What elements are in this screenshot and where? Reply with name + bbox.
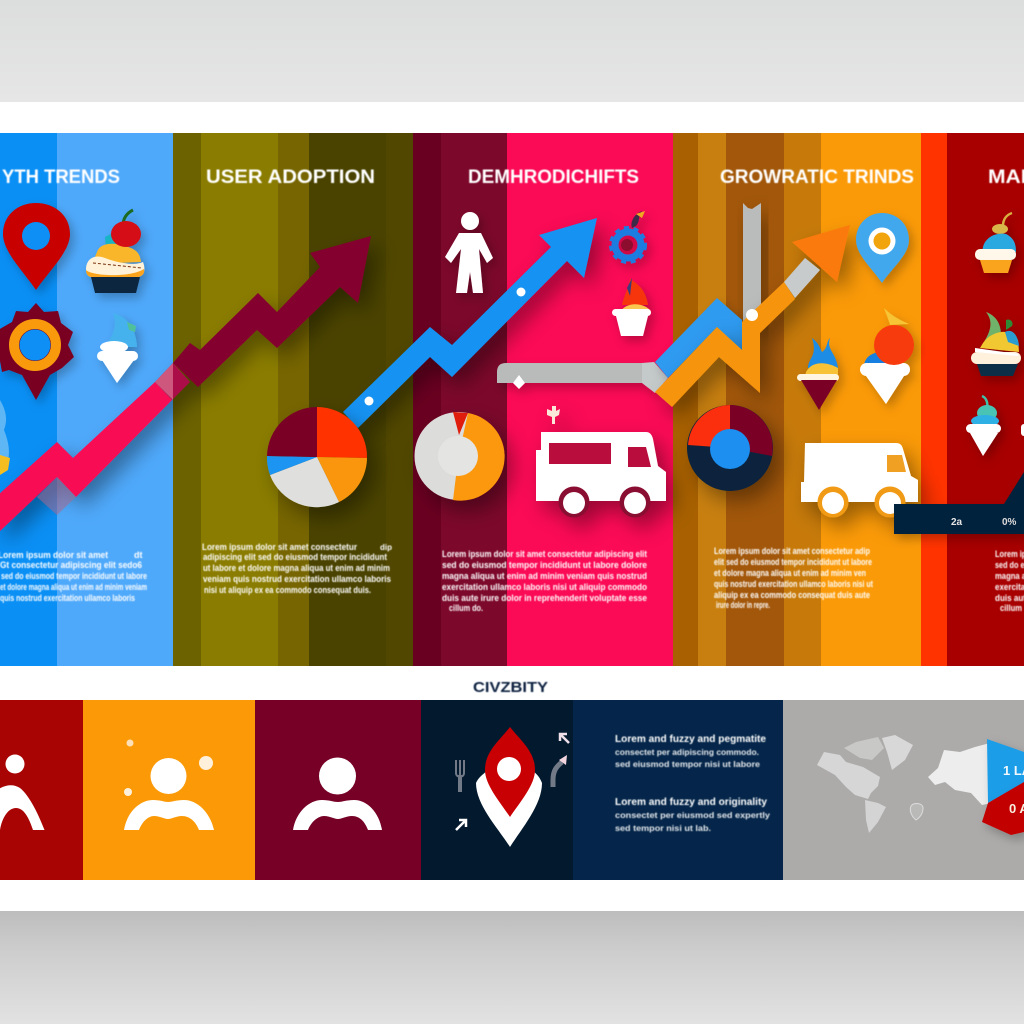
text block: column two: adipiscing elit sed do eiusmod tempor incididunt <box>203 552 387 562</box>
icon: blue map pin <box>856 213 909 283</box>
icon: red ball ice cream <box>860 308 914 404</box>
icon: maroon panel cupcake two <box>971 312 1021 376</box>
arrow fade: translucent joints <box>37 363 173 515</box>
text block: column one: et dolore magna aliqua ut enim ad minim veniam <box>0 582 147 592</box>
icon: truck one <box>536 406 666 518</box>
icon: person <box>293 758 382 830</box>
icon: gear pin <box>0 303 74 400</box>
chart: red map flag <box>982 782 1024 835</box>
icon: cherry cupcake <box>86 210 144 293</box>
icon: edge cone fragment <box>1021 424 1024 436</box>
text block: column three: Lorem ipsum dolor sit amet consectetur adipiscing elit <box>442 549 647 559</box>
text block: column two: nisi ut aliquip ex ea commodo consequat duis. <box>204 585 371 595</box>
icon: edge ice cream <box>0 400 10 475</box>
text block: lower paragraph two: Lorem and fuzzy and originality <box>615 796 767 808</box>
text block: column four: irure dolor in repre. <box>716 600 770 610</box>
stat label one: 2a <box>951 517 963 528</box>
icon: ice cream cone blue <box>97 313 138 383</box>
text block: column two <box>202 542 392 595</box>
text block: column one: Lorem ipsum dolor sit amet <box>0 550 108 560</box>
text block: column four: quis nostrud exercitation ullamco laboris nisi ut <box>714 579 873 589</box>
text block: lower paragraph two <box>615 796 770 833</box>
text block: column one: sed do eiusmod tempor incididunt ut labore <box>1 571 147 581</box>
icon: sundae cone <box>797 338 839 410</box>
heading: growth trends: YTH TRENDS <box>2 167 120 188</box>
icon: partial person <box>0 754 44 830</box>
text block: column one: dt <box>134 550 142 560</box>
text block: column one: Gt consectetur adipiscing elit sedo6 <box>0 560 142 570</box>
chart: donut two <box>414 412 505 501</box>
text block: column four: Lorem ipsum dolor sit amet consectetur adip <box>714 546 870 556</box>
text block: column three: cillum do. <box>449 603 483 613</box>
text block: column three: magna aliqua ut enim ad minim veniam quis nostrud <box>442 571 647 581</box>
arrow: blue growth arrow <box>343 218 597 428</box>
arrow: blue chevron <box>655 298 742 378</box>
icon: small arrow top <box>560 734 569 743</box>
text block: column five <box>995 549 1024 613</box>
text block: column three: duis aute irure dolor in reprehenderit voluptate esse <box>442 593 647 603</box>
text block: column three <box>442 549 647 613</box>
icon: blue gear <box>611 211 645 262</box>
heading: city: CIVZBITY <box>473 679 548 696</box>
text block: column two: dip <box>380 543 392 552</box>
heading: growth trends two: GROWRATIC TRINDS <box>720 167 914 188</box>
stat label two: 0% <box>1002 517 1017 528</box>
text block: column four <box>714 546 873 610</box>
icon: person with dots <box>124 740 214 830</box>
text block: column two: ut labore et dolore magna aliqua ut enim ad minim <box>203 563 390 573</box>
chart: pie one <box>267 407 367 507</box>
heading: user adoption: USER ADOPTION <box>206 167 375 188</box>
text block: lower paragraph one: consectet per adipiscing commodo. <box>615 747 759 757</box>
panel: striped top band <box>0 133 1024 666</box>
icon: curved road arrow <box>553 755 567 787</box>
icon: maroon panel cupcake one <box>975 213 1016 273</box>
text block: column one <box>0 550 147 603</box>
icon: truck two <box>801 443 918 518</box>
chart: dark stat bar <box>894 472 1024 534</box>
map: world continents <box>817 735 992 833</box>
text block: column two: Lorem ipsum dolor sit amet consectetur <box>202 542 357 552</box>
text block: column three: sed do eiusmod tempor incididunt ut labore dolore <box>442 560 647 570</box>
arrow: red to maroon growth arrow <box>0 236 371 533</box>
chart: blue map flag <box>987 739 1024 803</box>
text block: lower paragraph two: sed tempor nisi ut lab. <box>615 823 711 833</box>
panel: bottom band <box>0 700 1024 880</box>
icon: pink panel cupcake <box>612 278 651 336</box>
text block: lower paragraph one: sed eiusmod tempor nisi ut labore <box>615 759 760 769</box>
icon: small arrow bottom <box>456 820 466 830</box>
text block: lower paragraph one: Lorem and fuzzy and pegmatite <box>615 733 766 745</box>
chart: donut three <box>687 405 773 491</box>
text block: lower paragraph one <box>615 733 766 769</box>
icon: red map pin <box>3 203 70 290</box>
arrow: grey connector <box>497 362 668 393</box>
headings row <box>2 167 1024 188</box>
text block: column four: et dolore magna aliqua ut enim ad minim ven <box>714 568 866 578</box>
arrow: grey vertical bar <box>743 203 761 322</box>
icon: person <box>445 212 493 293</box>
text block: column three: exercitation ullamco laboris nisi ut aliquip commodo <box>442 582 647 592</box>
text block: column one: quis nostrud exercitation ullamco laboris <box>0 593 135 603</box>
heading: demographic shifts: DEMHRODICHIFTS <box>468 167 639 188</box>
text block: column four: aliquip ex ea commodo consequat duis aute <box>714 590 870 600</box>
text block: column four: elit sed do eiusmod tempor incididunt ut labore <box>714 557 872 567</box>
text block: lower paragraph two: consectet per eiusmod sed expertly <box>615 810 770 820</box>
icon: truck topper <box>547 406 560 424</box>
icon: maroon panel cone <box>966 396 1001 456</box>
icon: fork <box>456 760 464 792</box>
arrow: orange growth arrow <box>655 225 850 407</box>
icon: navy panel location pin <box>476 727 542 847</box>
text block: column two: veniam quis nostrud exercitation ullamco laboris <box>203 574 391 584</box>
